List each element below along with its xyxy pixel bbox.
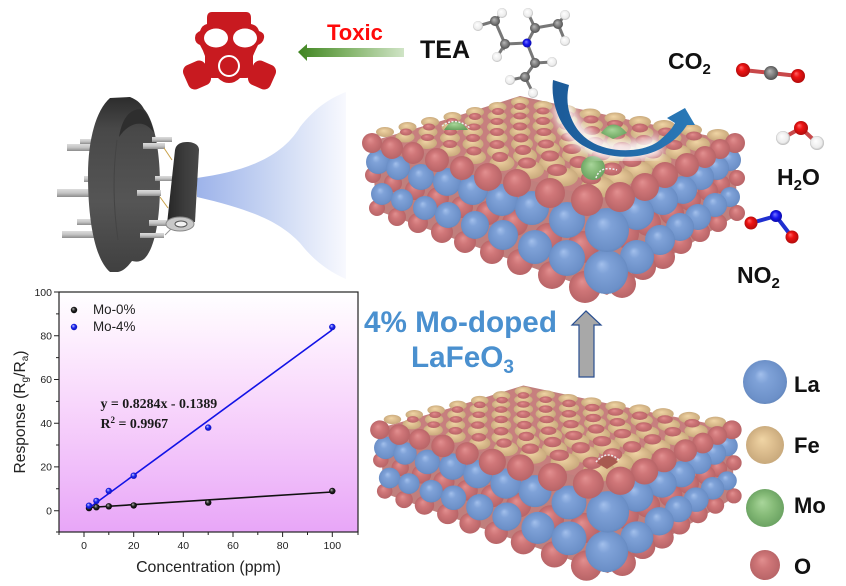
legend: atoms [743,360,826,580]
fit line: Mo-0% [89,492,332,508]
icon: red gas mask [181,12,278,92]
arrow: grey up arrow [572,311,601,377]
legend item: Fe [746,426,820,464]
regression equation: y = 0.8284x - 0.1389 [100,397,217,412]
panel: sensor beam [197,92,346,279]
label: H2O: 2 [794,177,802,194]
y axis tick labels: 20 [40,462,52,474]
regression equation [100,397,217,432]
legend item: Fe: Fe [794,433,820,458]
x axis tick labels: 80 [277,540,289,552]
label: TEA: TEA [420,36,470,64]
icon: gas sensor device [57,97,199,272]
panel: doped LaFeO3 slab [362,96,745,303]
icon: surface site on undoped slab [596,455,619,469]
y axis tick labels: 40 [40,418,52,430]
y axis title: a [20,355,31,361]
regression equation: 2 [111,415,116,425]
fit line: Mo-4% [89,330,332,508]
label: NO2: 2 [772,275,780,292]
label: H2O: H [777,164,794,190]
regression equation: R [100,417,111,432]
y axis tick labels: 0 [46,506,52,518]
panel: reaction glow [562,105,660,152]
heading: 4% Mo-doped LaFeO3 [364,306,557,378]
chart legend [71,302,136,334]
icon: TEA molecule [473,8,570,98]
y axis tick labels: 100 [34,287,52,299]
heading: 4% Mo-doped LaFeO3: LaFeO [411,341,503,374]
icon: Mo dopant sites [442,121,617,180]
y axis title: ) [12,351,29,356]
y axis title: g [20,377,31,382]
y axis tick labels: 60 [40,374,52,386]
x axis tick labels: 100 [324,540,341,552]
legend item: O: O [794,554,811,579]
y axis title: /R [12,361,29,377]
label: CO2: CO [668,48,702,74]
y axis title: Response (R [12,382,29,473]
label: CO2: 2 [702,61,711,78]
legend item: La [743,360,820,404]
x axis tick labels: 0 [81,540,87,552]
chart legend: Mo-4% [93,319,136,334]
legend item: La: La [794,372,820,397]
arrow: green toxic arrow [298,44,404,61]
data points: Mo-0% [86,488,335,511]
x axis title: Concentration (ppm) [136,559,281,576]
x axis tick labels: 40 [177,540,189,552]
icon: Mo site under arrow [601,124,627,139]
icon: CO2 molecule [736,63,805,83]
heading: 4% Mo-doped LaFeO3: 3 [503,357,514,378]
icon: H2O molecule [776,121,824,150]
y axis tick labels: 80 [40,330,52,342]
x axis tick labels: 60 [227,540,239,552]
heading: Toxic: Toxic [327,20,383,45]
arrow: curved blue reaction arrow [553,80,695,157]
data points: Mo-4% [86,324,335,509]
icon: NO2 molecule [744,210,798,244]
legend item: O [750,550,811,580]
legend item: Mo [746,489,826,527]
x axis tick labels: 20 [128,540,140,552]
chart legend: Mo-0% [93,302,136,317]
label: H2O: O [802,164,820,190]
label: NO2: NO [737,262,772,288]
legend item: Mo: Mo [794,493,826,518]
regression equation: = 0.9967 [115,417,168,432]
heading: 4% Mo-doped LaFeO3: 4% Mo-doped [364,306,557,339]
panel: undoped LaFeO3 slab [370,386,742,581]
x axis tick labels [81,540,341,552]
y axis tick labels [34,287,52,518]
chart: response vs concentration [12,287,358,576]
